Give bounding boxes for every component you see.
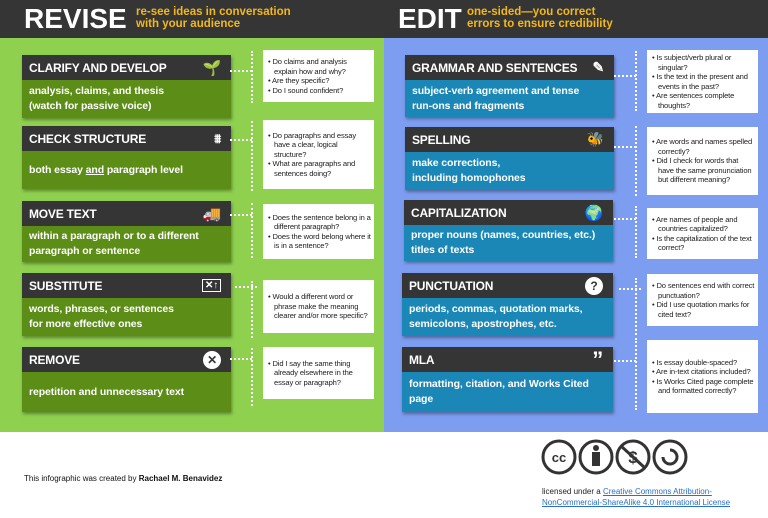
card: substitute: words, phrases, or sentences — [29, 303, 174, 315]
subtitle: revise: with your audience — [136, 18, 240, 30]
questions: remove — [263, 347, 374, 399]
questions: clarify: • Do claims and analysis explain how and why? — [268, 57, 347, 76]
card: grammar: ✎ — [592, 59, 604, 75]
card: move text — [22, 201, 231, 262]
card: move text: paragraph or sentence — [29, 245, 140, 257]
card: structure: ⩩ — [214, 130, 221, 146]
card: mla: ” — [592, 346, 603, 372]
title: revise: REVISE — [24, 3, 127, 34]
card: spelling: SPELLING — [412, 132, 470, 146]
card: clarify: CLARIFY AND DEVELOP — [29, 60, 167, 74]
card: grammar: subject-verb agreement and tense — [412, 84, 579, 96]
card: remove: ✕ — [207, 352, 217, 366]
subtitle: revise — [136, 6, 291, 30]
subtitle: edit — [467, 6, 613, 30]
questions: capitalization — [647, 208, 758, 259]
questions: structure — [263, 120, 374, 189]
card: clarify: analysis, claims, and thesis — [29, 85, 164, 97]
questions: grammar — [647, 50, 758, 113]
panel: edit — [384, 38, 768, 432]
questions: spelling: • Are words and names spelled correctly? — [652, 137, 752, 156]
card: spelling: including homophones — [412, 172, 526, 184]
license text — [542, 487, 730, 507]
card: remove: repetition and unnecessary text — [29, 386, 184, 398]
card: capitalization: titles of texts — [411, 244, 474, 256]
card: substitute: ✕↑ — [205, 280, 218, 291]
questions: structure: • What are paragraphs and sentences doing? — [268, 159, 355, 178]
subtitle: edit: one-sided—you correct — [467, 6, 595, 18]
card: remove: REMOVE — [29, 352, 80, 366]
card: capitalization: CAPITALIZATION — [411, 206, 506, 220]
questions: grammar: • Is the text in the present and events in the past? — [652, 72, 748, 90]
questions: substitute — [263, 280, 374, 333]
icon: cc license badges — [542, 440, 688, 474]
subtitle: revise: re-see ideas in conversation — [136, 6, 291, 18]
questions: mla — [647, 340, 758, 413]
title: edit: EDIT — [398, 3, 462, 34]
license text: NonCommercial-ShareAlike 4.0 International License — [542, 498, 730, 507]
footer credit: This infographic was created by Rachael M. Benavidez — [24, 474, 222, 483]
card: substitute: for more effective ones — [29, 318, 142, 330]
questions: punctuation: • Did I use quotation marks for cited text? — [652, 300, 749, 318]
panel: revise — [0, 38, 384, 432]
questions: mla: • Is Works Cited page complete and formatted correctly? — [652, 376, 753, 395]
card: grammar: GRAMMAR AND SENTENCES — [412, 60, 577, 74]
card: punctuation: PUNCTUATION — [409, 278, 493, 292]
questions: punctuation — [647, 274, 758, 326]
card: capitalization: 🌍 — [585, 204, 603, 222]
card: grammar — [405, 55, 614, 117]
card: structure: both essay paragraph level — [29, 164, 183, 176]
card: spelling — [405, 127, 614, 190]
questions: grammar: • Is subject/verb plural or singular? — [652, 53, 731, 72]
questions: spelling: • Did I check for words that have the same pronunciation but different meaning? — [652, 156, 751, 184]
questions: move: • Does the sentence belong in a different paragraph? — [268, 212, 371, 231]
card: structure — [22, 126, 231, 189]
questions: capitalization: • Are names of people and countries capitalized? — [652, 214, 737, 233]
questions: mla: • Is essay double-spaced? — [652, 358, 737, 366]
card: mla: page — [409, 393, 433, 405]
card: structure: CHECK STRUCTURE — [29, 132, 146, 146]
card: move text: within a paragraph or to a different — [29, 230, 199, 242]
header bar — [0, 0, 768, 38]
questions: grammar: • Are sentences complete thoughts? — [652, 91, 734, 110]
icon: cc license badges: cc — [552, 450, 566, 465]
questions: move: • Does the word belong where it is in a sentence? — [268, 232, 371, 250]
card: grammar: run-ons and fragments — [412, 100, 524, 112]
questions: mla: • Are in-text citations included? — [652, 367, 751, 376]
questions: spelling — [647, 127, 758, 195]
questions: clarify — [263, 50, 374, 102]
card: capitalization — [404, 200, 613, 261]
card: punctuation: ? — [590, 278, 598, 292]
card: move text: 🚚 — [203, 206, 221, 222]
questions: capitalization: • Is the capitalization of the text correct? — [652, 234, 752, 252]
license text: licensed under a Creative Commons Attribution- — [542, 487, 712, 496]
questions: substitute: • Would a different word or phrase make the meaning clearer and/or more specific? — [268, 292, 368, 320]
card: structure: and — [86, 164, 104, 176]
card: substitute — [22, 273, 231, 336]
card: mla: MLA — [409, 352, 434, 366]
card: mla: formatting, citation, and Works Cited — [409, 378, 589, 390]
questions: clarify: • Are they specific? — [268, 76, 329, 85]
subtitle: edit: errors to ensure credibility — [467, 18, 613, 30]
card: clarify: 🌱 — [203, 60, 221, 76]
questions: remove: • Did I say the same thing already elsewhere in the essay or paragraph? — [268, 359, 353, 387]
card: remove — [22, 347, 231, 412]
card: clarify — [22, 55, 231, 118]
card: clarify: (watch for passive voice) — [29, 100, 151, 112]
card: capitalization: proper nouns (names, countries, etc.) — [411, 229, 595, 241]
card: punctuation: semicolons, apostrophes, etc. — [409, 318, 557, 330]
card: move text: MOVE TEXT — [29, 206, 97, 220]
card: spelling: make corrections, — [412, 157, 500, 169]
card: substitute: SUBSTITUTE — [29, 278, 102, 292]
questions: structure: • Do paragraphs and essay have a clear, logical structure? — [268, 131, 356, 159]
icon: cc license badges: $ — [628, 448, 638, 467]
questions: punctuation: • Do sentences end with correct punctuation? — [652, 281, 754, 300]
card: punctuation: periods, commas, quotation marks, — [409, 303, 582, 315]
questions: move — [263, 204, 374, 259]
card: mla — [402, 347, 613, 412]
card: spelling: 🐝 — [587, 131, 604, 147]
questions: clarify: • Do I sound confident? — [268, 86, 343, 94]
card: punctuation — [402, 273, 613, 336]
